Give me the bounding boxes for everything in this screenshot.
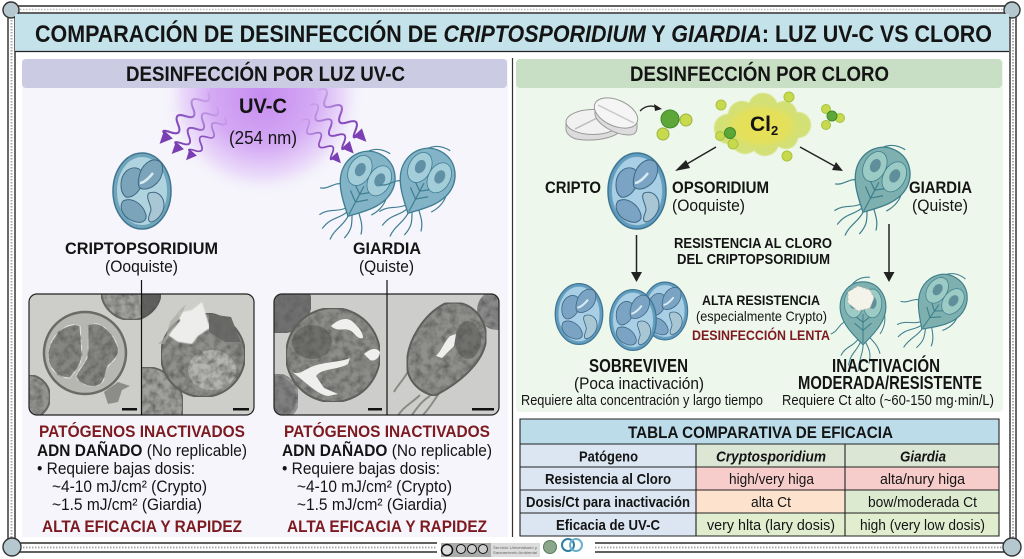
callout: high resistance — [692, 292, 830, 343]
text block: giardia results: ALTA EFICACIA Y RAPIDEZ — [287, 517, 487, 536]
table rows: Dosis/Ct para inactivación — [526, 494, 690, 511]
table rows: bow/moderada Ct — [868, 494, 978, 511]
cc badge — [441, 543, 491, 557]
table rows: alta Ct — [751, 494, 792, 511]
arrow: cloud to giardia — [800, 147, 843, 171]
icon: UV rays left — [155, 88, 229, 164]
label: giardia chlorine — [909, 178, 972, 215]
text block: survive — [521, 356, 763, 409]
formula: Cl2: 2 — [771, 123, 778, 138]
arrow: cryptosporidium down — [631, 235, 642, 282]
callout: chlorine resistance: DEL CRIPTOPSORIDIUM — [677, 251, 830, 268]
table rows: Resistencia al Cloro — [545, 471, 671, 488]
icon: giardia chlorine — [816, 128, 922, 251]
text block: inactivation: MODERADA/RESISTENTE — [798, 373, 982, 393]
text block: giardia results: PATÓGENOS INACTIVADOS — [284, 422, 490, 441]
text block: cryptosporidium results: • Requiere bajas dosis: — [37, 459, 195, 478]
panel background: chlorine — [516, 59, 1003, 412]
micrograph: cryptosporidium — [30, 294, 254, 414]
UV-C label: UV-C — [239, 95, 287, 118]
arrow: giardia down — [884, 224, 894, 282]
heading: UV-C — [22, 59, 507, 88]
footer licence logos — [441, 539, 582, 557]
callout: high resistance: DESINFECCIÓN LENTA — [692, 326, 830, 343]
institution box: Saneamiento Ambiental — [493, 550, 537, 555]
icon: chlorine cloud — [714, 93, 811, 156]
text block: inactivation — [782, 355, 994, 409]
icon: chlorine molecule — [657, 110, 692, 140]
label: cryptosporidium split: OPSORIDIUM — [672, 178, 769, 197]
text block: giardia results: • Requiere bajas dosis: — [282, 459, 440, 478]
table title: TABLA COMPARATIVA DE EFICACIA — [628, 423, 893, 442]
label: giardia — [353, 239, 421, 276]
table rows: Eficacia de UV-C — [556, 517, 660, 534]
UV-C label: (254 nm) — [229, 128, 297, 148]
callout: high resistance: ALTA RESISTENCIA — [702, 292, 820, 308]
label: cryptosporidium split: CRIPTO — [545, 178, 601, 197]
table rows: high/very higa — [729, 471, 815, 488]
panel background: UV-C — [22, 59, 508, 537]
label: cryptosporidium split — [545, 178, 769, 215]
icon: oocyst chlorine — [608, 153, 666, 229]
text block: survive: (Poca inactivación) — [574, 374, 704, 393]
institution box — [491, 543, 540, 557]
label: cryptosporidium: (Ooquiste) — [105, 257, 178, 276]
heading: chlorine: DESINFECCIÓN POR CLORO — [630, 62, 889, 86]
micrograph: giardia — [274, 294, 498, 414]
text block: cryptosporidium results: ~4-10 mJ/cm² (Crypto) — [52, 477, 207, 496]
callout: chlorine resistance: RESISTENCIA AL CLORO — [674, 235, 832, 252]
formula: Cl2: Cl — [750, 113, 771, 136]
table rows: very hlta (lary dosis) — [707, 517, 835, 534]
panel: UV-C disinfection — [22, 59, 508, 537]
label: cryptosporidium — [65, 239, 218, 276]
icon: chlorine particles — [716, 92, 844, 161]
logo: seal — [544, 540, 556, 554]
text block: inactivation: INACTIVACIÓN — [832, 355, 940, 376]
table rows: high (very low dosis) — [860, 517, 985, 534]
text block: giardia results — [282, 422, 492, 536]
table: efficacy comparison — [520, 419, 999, 536]
text block: giardia results: ADN DAÑADO (No replicable) — [282, 440, 492, 460]
icon: chlorine tablets — [566, 92, 642, 140]
panel: chlorine disinfection — [516, 59, 1003, 412]
label: giardia chlorine: GIARDIA — [909, 178, 972, 197]
text block: giardia results: ~1.5 mJ/cm² (Giardia) — [297, 495, 447, 514]
text block: inactivation: Requiere Ct alto (~60-150 mg·min/L) — [782, 393, 994, 409]
callout: chlorine resistance — [674, 235, 832, 268]
text block: cryptosporidium results: ADN DAÑADO (No replicable) — [37, 440, 247, 460]
icon: giardia cysts — [301, 129, 467, 255]
text block: cryptosporidium results: ALTA EFICACIA Y RAPIDEZ — [42, 517, 242, 536]
icon: UV rays right — [298, 86, 371, 167]
table rows: Cryptosporidium — [716, 448, 826, 466]
table rows: Giardia — [900, 448, 946, 466]
heading: chlorine — [516, 59, 1002, 88]
text block: cryptosporidium results — [37, 422, 247, 536]
icon: surviving oocysts — [555, 282, 688, 350]
UV glow — [173, 88, 354, 186]
text block: survive: SOBREVIVEN — [589, 356, 688, 376]
text block: giardia results: ~4-10 mJ/cm² (Crypto) — [297, 477, 452, 496]
text block: survive: Requiere alta concentración y largo tiempo — [521, 393, 763, 409]
callout: high resistance: (especialmente Crypto) — [696, 308, 827, 324]
arrow: tablet to molecule — [640, 104, 662, 111]
title banner: COMPARACIÓN DE DESINFECCIÓN DE CRIPTOSPORIDIUM Y GIARDIA: LUZ UV-C VS CLORO — [35, 20, 992, 48]
text block: cryptosporidium results: ~1.5 mJ/cm² (Giardia) — [52, 495, 202, 514]
label: giardia chlorine: (Quiste) — [912, 196, 968, 215]
institution box: Servicio Universitario y — [493, 545, 537, 550]
icon: damaged giardia — [831, 256, 979, 371]
arrow: cloud to cryptosporidium — [675, 147, 716, 171]
UV-C label — [229, 95, 297, 148]
table rows — [526, 448, 985, 534]
heading: UV-C: DESINFECCIÓN POR LUZ UV-C — [126, 62, 405, 86]
icon: cryptosporidium oocyst — [113, 153, 171, 229]
label: cryptosporidium split: (Ooquiste) — [672, 196, 745, 215]
label: giardia: (Quiste) — [359, 257, 414, 276]
micrograph frame and stem: giardia — [274, 280, 499, 415]
micrograph frame and stem: cryptosporidium — [29, 280, 254, 415]
text block: cryptosporidium results: PATÓGENOS INACTIVADOS — [39, 422, 245, 441]
label: giardia: GIARDIA — [353, 239, 421, 258]
table rows: Patógeno — [579, 448, 638, 466]
table rows: alta/nury higa — [880, 471, 966, 488]
label: cryptosporidium: CRIPTOPSORIDIUM — [65, 239, 218, 258]
logo: rings — [562, 539, 582, 551]
